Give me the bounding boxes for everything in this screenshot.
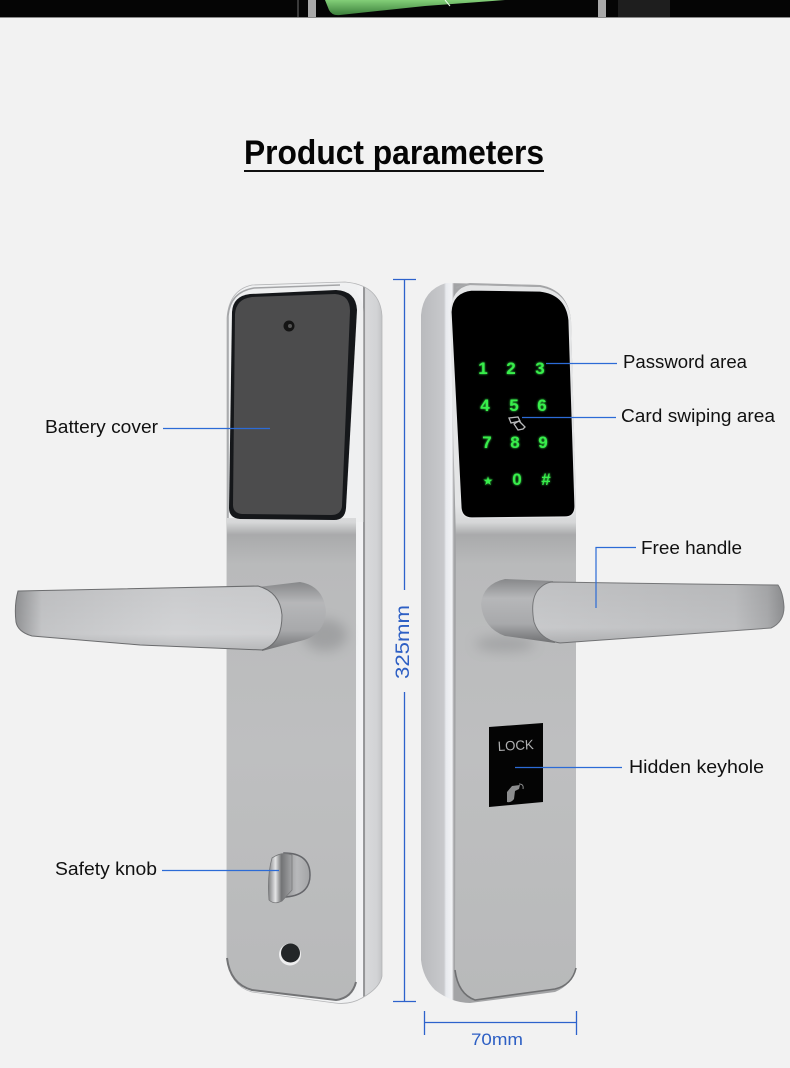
keypad glass: 4	[480, 396, 490, 415]
icon: finger touch	[507, 785, 520, 802]
dimension: width 70mm: 70mm	[471, 1030, 523, 1049]
label: password area: Password area	[623, 352, 748, 372]
lock body side	[421, 283, 576, 1003]
chrome rim around cover	[228, 286, 364, 522]
keypad glass: 5	[509, 396, 519, 415]
top rim shading	[456, 284, 540, 288]
keypad glass: 9	[538, 433, 548, 452]
keypad glass	[451, 290, 575, 518]
right handle neck	[481, 579, 555, 643]
rear plate	[227, 518, 356, 1000]
keypad digits: 1	[478, 359, 488, 378]
handle shadow	[303, 619, 347, 651]
title: Product parameters	[244, 134, 544, 172]
label: free handle	[596, 538, 742, 608]
keypad glass: #	[541, 470, 551, 489]
label: safety knob: Safety knob	[55, 859, 157, 879]
round hole	[279, 944, 301, 966]
label: battery cover: Battery cover	[45, 417, 158, 437]
keypad glass: 8	[510, 433, 520, 452]
hidden keyhole panel: LOCK	[497, 737, 534, 754]
label: free handle: Free handle	[641, 538, 742, 558]
hidden keyhole panel	[489, 723, 543, 807]
keypad glass: 2	[506, 359, 516, 378]
top band: cropped previous product image	[0, 0, 790, 18]
keypad glass: 6	[537, 396, 547, 415]
front plate	[450, 285, 576, 1000]
safety knob	[268, 853, 310, 903]
left handle lever	[15, 586, 282, 650]
icon: card reader	[509, 417, 525, 430]
keypad glass: 7	[482, 433, 492, 452]
label: card swiping area: Card swiping area	[621, 406, 776, 426]
dimension: width 70mm	[424, 1011, 577, 1049]
keypad glass: 3	[535, 359, 545, 378]
right lock: front panel	[421, 283, 784, 1003]
left lock: back panel	[15, 282, 382, 1003]
dimension: height 325mm	[393, 279, 416, 1002]
lock body side	[227, 282, 382, 1003]
right handle lever	[533, 582, 784, 643]
keypad glass: 0	[512, 470, 522, 489]
screw	[284, 320, 294, 332]
keypad glass: ★	[483, 474, 493, 488]
dimension: height 325mm: 325mm	[393, 605, 414, 679]
battery cover	[229, 290, 357, 520]
label: hidden keyhole: Hidden keyhole	[629, 757, 764, 777]
handle shadow	[475, 636, 535, 652]
left handle neck	[258, 582, 326, 651]
